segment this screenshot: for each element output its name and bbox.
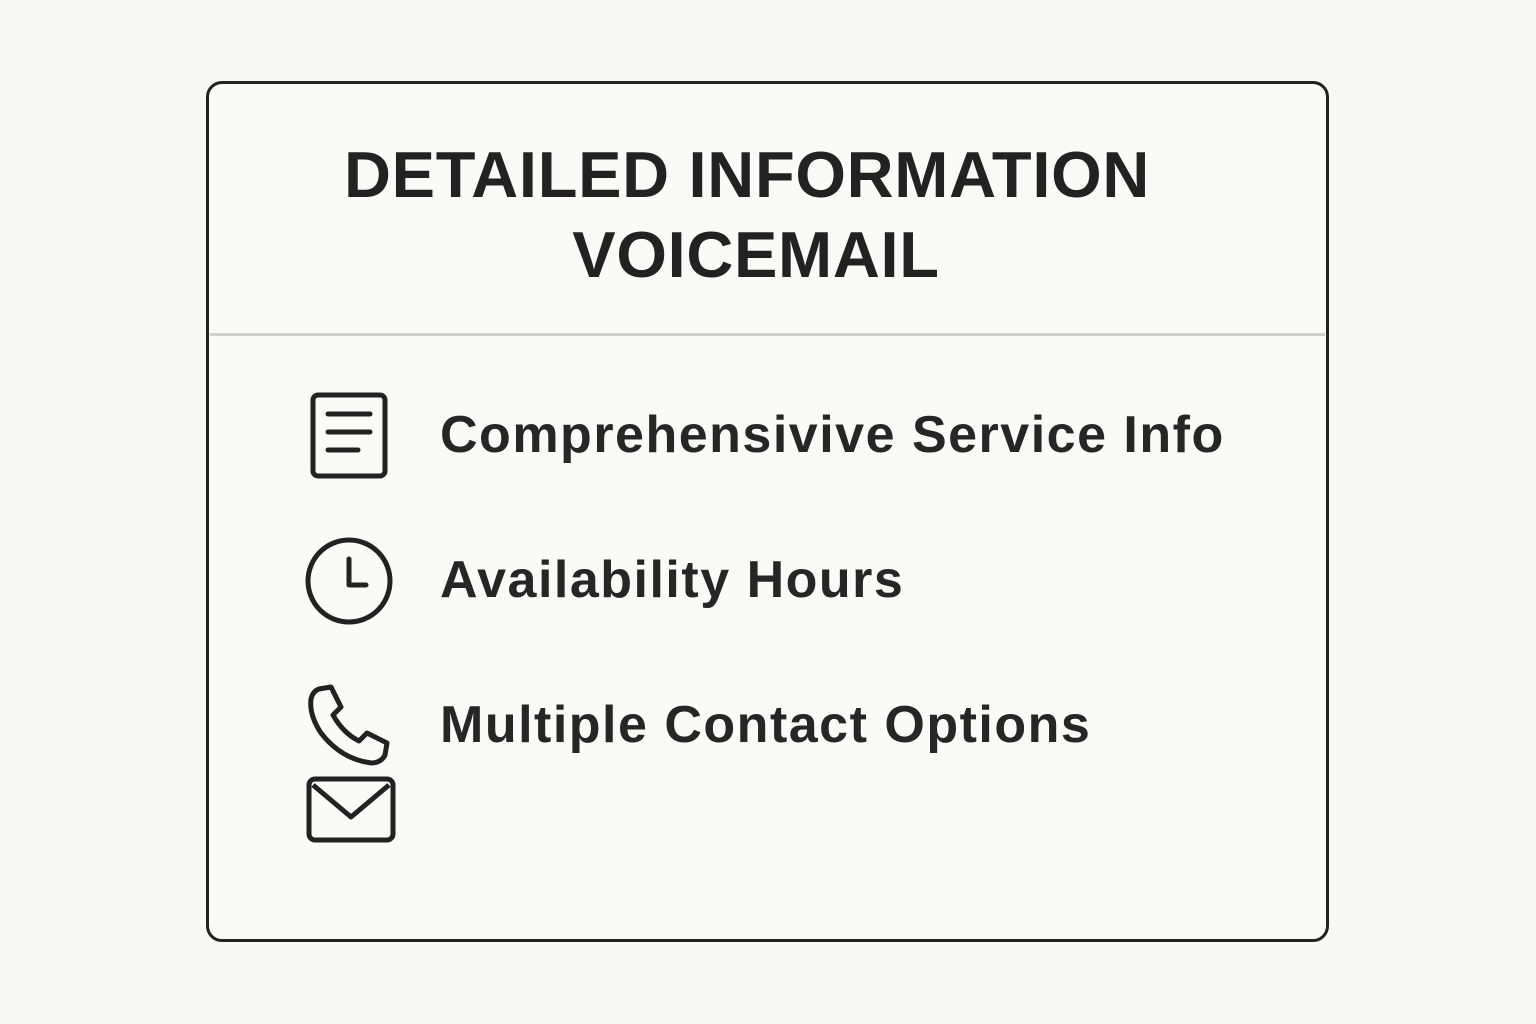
- text: comprehensive service info: Comprehensivive Service Info: [440, 406, 1225, 464]
- icon: envelope: [306, 776, 396, 842]
- text: multiple contact options: Multiple Contact Options: [440, 696, 1091, 754]
- title: DETAILED INFORMATION: [344, 138, 1150, 211]
- text: availability hours: Availability Hours: [440, 551, 904, 609]
- icon: clock: [306, 538, 392, 624]
- title: VOICEMAIL: [572, 218, 940, 291]
- panel: card: [206, 81, 1329, 942]
- title: [344, 138, 1150, 291]
- icon: phone: [308, 684, 390, 766]
- icon: document: [310, 392, 388, 478]
